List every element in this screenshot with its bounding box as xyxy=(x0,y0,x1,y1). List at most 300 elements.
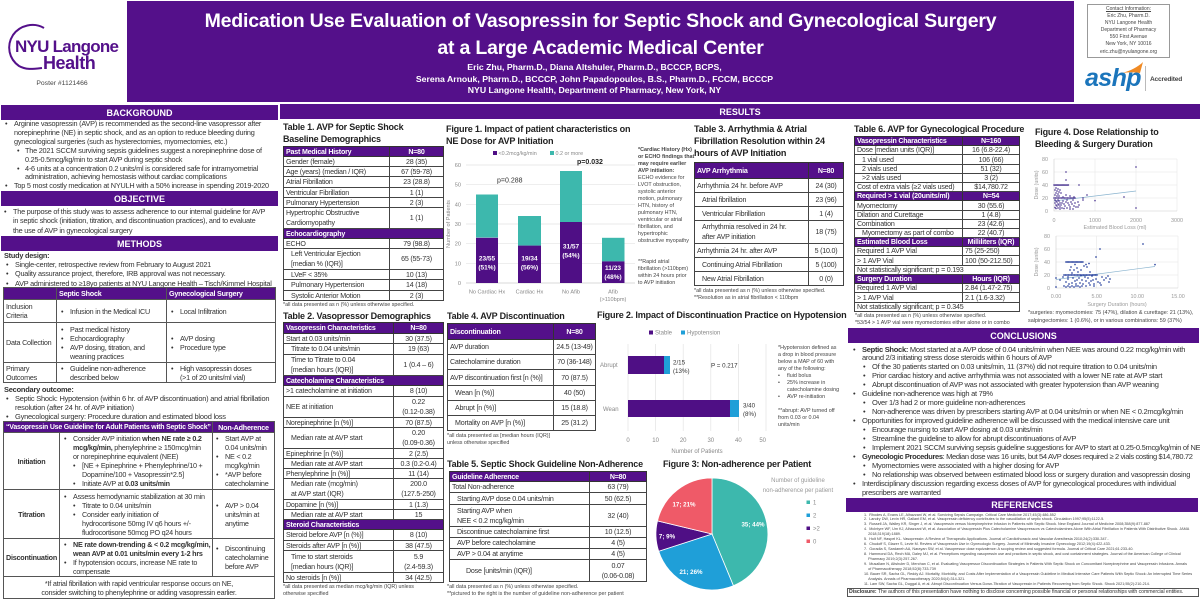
table 2: vasopressor demographics: Median rate (mcg/min) xyxy=(291,480,358,488)
table 5: septic shock guideline non-adherence: (0.06-0.08) xyxy=(602,572,634,580)
heading: table 1: Baseline Demographics xyxy=(283,134,381,144)
note: rapid atrial fibrillation definition: fibrillation (>110bpm) xyxy=(638,266,688,272)
table 6: AVP for gynecological procedure: $14,780.72 xyxy=(974,183,1008,191)
chart: figure 3 pie chart: 17; 21% xyxy=(672,502,696,508)
footnote: figure 4 xyxy=(1028,310,1193,324)
table 3: arrhythmia and atrial fibrillation resolution: New Atrial Fibrillation xyxy=(702,274,764,282)
table 6: AVP for gynecological procedure: Myomectomy as part of combo xyxy=(862,229,954,237)
text: secondary outcome: Secondary outcome: xyxy=(4,385,74,394)
table 3: arrhythmia and atrial fibrillation resolution: N=80 xyxy=(818,166,834,174)
table 3: arrhythmia and atrial fibrillation resolution xyxy=(694,162,844,286)
disclosure box: Disclosure: The authors of this presentation have nothing to disclose concerning possible financial or personal relationships with commercial entities. xyxy=(849,589,1183,595)
chart: figure 2 horizontal bars: (8%) xyxy=(743,411,756,418)
table 2: vasopressor demographics: Catecholamine Characteristics xyxy=(286,376,384,384)
table 6: AVP for gynecological procedure: 2.84 (1.47-2.75) xyxy=(965,284,1012,292)
table: study criteria: Data Collection xyxy=(6,338,51,347)
table 6: AVP for gynecological procedure: Myomectomy xyxy=(857,202,897,210)
table: study criteria: Echocardiography xyxy=(70,334,124,342)
table 2: vasopressor demographics: Median rate at AVP start xyxy=(291,510,362,518)
table 3: arrhythmia and atrial fibrillation resolution: Ventricular Fibrillation xyxy=(702,210,765,218)
heading: figure 3: Figure 3: Non-adherence per Patient xyxy=(663,459,811,469)
table: vasopressin use guideline: “Vasopressin Use Guideline for Adult Patients with Septic Shock” xyxy=(6,424,211,430)
text: conclusions: Prior cardiac history and active arrhythmia was not associated with a lower NE rate at AVP start xyxy=(872,371,1162,380)
text: references xyxy=(864,512,1192,586)
text: conclusions: Interdisciplinary discussion regarding excess doses of AVP for gynecological procedures with individual xyxy=(862,479,1176,488)
text: references: 3. Russell JA, Walley KR, Singer J, et al. Vasopressin versus Norepinephrine Infusion in Patients with Septic Shock. New England Journal of Medicine 2008;358(9):877-887 xyxy=(864,522,1150,526)
table 4: AVP discontinuation: 25 (31.2) xyxy=(561,419,588,427)
table: vasopressin use guideline: *AVP before xyxy=(225,470,261,479)
chart: figure 4 dose vs surgery duration scatter: 15.00 xyxy=(1171,294,1185,300)
table: vasopressin use guideline: anytime xyxy=(225,518,249,528)
text: references: 2018;319(18):1889. xyxy=(868,532,901,536)
table: vasopressin use guideline: Non-Adherence xyxy=(218,422,269,432)
table 2: vasopressor demographics: at AVP start (IQR) xyxy=(291,490,344,498)
table: vasopressin use guideline: *If atrial fibrillation with rapid ventricular response occurs on NE, xyxy=(45,578,233,588)
chart: figure 4 dose vs estimated blood loss scatter xyxy=(1034,157,1183,230)
title: at a Large Academic Medical Center xyxy=(437,36,764,58)
chart: figure 1 stacked bars: (48%) xyxy=(604,274,622,281)
authors and affiliation: Eric Zhu, Pharm.D., Diana Altshuler, Pharm.D., BCCCP, BCPS, xyxy=(467,62,722,72)
footnote: table 2 xyxy=(283,584,414,596)
text: background: gynecological surgeries (such as hysterectomies, myomectomies, etc.) xyxy=(14,137,227,146)
text: conclusions: Encourage nursing to start AVP dosing at 0.03 units/min xyxy=(872,425,1042,434)
table: study criteria: Criteria xyxy=(6,311,27,320)
text: conclusions: prescribers are warranted xyxy=(862,488,941,497)
chart: figure 4 dose vs surgery duration scatter xyxy=(1034,234,1185,308)
table 5: septic shock guideline non-adherence: Guideline Adherence xyxy=(452,472,519,480)
note: rapid atrial fibrillation definition: within 24 hours prior xyxy=(638,272,687,278)
table 2: vasopressor demographics: 1 (1.3) xyxy=(409,500,428,508)
table 5: septic shock guideline non-adherence: AVP > 0.04 at anytime xyxy=(457,550,523,558)
table 1: septic shock baseline demographics: Gender (female) xyxy=(286,158,335,166)
chart: figure 4 dose vs estimated blood loss scatter: 40 xyxy=(1042,183,1048,189)
table 2: vasopressor demographics: Steroid Characteristics xyxy=(286,520,359,528)
note: hypotension definition: from 0.03 or 0.04 xyxy=(778,414,819,420)
chart: figure 4 dose vs estimated blood loss scatter: 0 xyxy=(1052,218,1056,224)
table: vasopressin use guideline: Assess hemodynamic stabilization at 30 min xyxy=(73,492,205,500)
text: conclusions: around 2/3 initiating stress dose steroids within 6 hours of AVP xyxy=(862,353,1052,362)
table 5: septic shock guideline non-adherence: AVP before catecholamine xyxy=(457,539,536,547)
table 6: AVP for gynecological procedure: 2.1 (1.6-3.32) xyxy=(965,294,1005,302)
table 2: vasopressor demographics xyxy=(283,322,444,583)
chart: figure 1 stacked bars: p=0.032 xyxy=(577,159,603,166)
text: conclusions: Implement 2021 SCCM surviving sepsis guideline suggestions for AVP to start at 0.25-0.5mcg/kg/min of NE xyxy=(872,443,1200,452)
table 3: arrhythmia and atrial fibrillation resolution: 5 (100) xyxy=(815,260,837,268)
table 4: AVP discontinuation: Mortality on AVP [n (%)] xyxy=(455,419,525,427)
text: conclusions: Guideline non-adherence was high at 79% xyxy=(862,389,993,398)
text: conclusions xyxy=(853,344,1200,497)
chart: figure 1 stacked bars: p=0.288 xyxy=(497,178,523,184)
text: references: Analysis. Annals of Pharmacotherapy 2020;54(4):314-321. xyxy=(868,577,965,581)
text: study design: Single-center, retrospective review from February to August 2021 xyxy=(15,260,211,269)
legend: figure 3: 0 xyxy=(813,540,817,546)
table 6: AVP for gynecological procedure: Dilation and Curettage xyxy=(857,211,923,219)
chart: figure 1 stacked bars: 40 xyxy=(455,202,461,208)
table 2: vasopressor demographics: 0.20 xyxy=(412,429,425,437)
table: vasopressin use guideline: AVP > 0.04 xyxy=(225,500,259,510)
contact information box: NYU Langone Health xyxy=(1105,20,1152,26)
table: vasopressin use guideline: Start AVP at xyxy=(225,434,261,443)
text: references: 9. Musallam N, Altshuler D, Merchan C, et al. Evaluating Vasopressor Discontinuation Strategies in Patients With Septic Shock on Concomitant Norepinephrine and Vasopressin Infusions. Annals xyxy=(864,562,1187,566)
table 5: septic shock guideline non-adherence: Starting AVP when xyxy=(457,506,512,514)
chart: figure 1 stacked bars: No Afib xyxy=(562,290,580,296)
table 6: AVP for gynecological procedure: >2 vials used xyxy=(862,174,901,182)
table: vasopressin use guideline: mcg/kg/min xyxy=(225,461,260,470)
table 3: arrhythmia and atrial fibrillation resolution: AVP Arrhythmia xyxy=(697,166,748,174)
table 1: septic shock baseline demographics: N=80 xyxy=(408,148,425,156)
heading: table 4: Table 4. AVP Discontinuation xyxy=(447,311,565,321)
table 4: AVP discontinuation: Discontinuation xyxy=(450,328,501,336)
text: secondary outcome: resolution (after 24 hr. of AVP initiation) xyxy=(15,403,134,412)
table 1: septic shock baseline demographics: LVeF < 35% xyxy=(291,270,327,278)
table 3: arrhythmia and atrial fibrillation resolution: Arrhythmia 24 hr. after AVP xyxy=(697,246,777,254)
text: background: Arginine vasopressin (AVP) is recommended as the second-line vasopressor after xyxy=(14,119,261,128)
table 2: vasopressor demographics: 0.3 (0.2-0.4) xyxy=(400,460,437,468)
table: vasopressin use guideline: consider switching to phenylephrine or adding vasopressin earlier. xyxy=(41,588,237,596)
heading: table 3 xyxy=(694,124,825,158)
authors and affiliation xyxy=(416,62,773,95)
table 4: AVP discontinuation: 15 (18.8) xyxy=(561,404,588,412)
note: cardiac history definition: systolic anterior xyxy=(638,188,675,194)
heading: results xyxy=(280,104,1200,119)
text: conclusions: Streamline the guideline to allow for abrupt discontinuations of AVP xyxy=(872,434,1076,443)
title: Medication Use Evaluation of Vasopressin for Septic Shock and Gynecological Surgery xyxy=(205,10,996,32)
table 6: AVP for gynecological procedure: Cost of extra vials (≥2 vials used) xyxy=(857,183,954,191)
table: vasopressin use guideline: catecholamine xyxy=(225,479,268,488)
chart: figure 4 dose vs estimated blood loss scatter: 80 xyxy=(1042,157,1048,163)
table 2: vasopressor demographics: 30 (37.5) xyxy=(405,334,432,342)
chart: figure 4 dose vs surgery duration scatter: 0 xyxy=(1047,286,1050,292)
table 5: septic shock guideline non-adherence: 0.07 xyxy=(611,562,624,570)
text: objective xyxy=(4,207,265,235)
table 1: septic shock baseline demographics: Systolic Anterior Motion xyxy=(291,292,360,300)
chart: figure 4 dose vs estimated blood loss scatter: 60 xyxy=(1042,170,1048,176)
note: hypotension definition: 25% increase in xyxy=(787,380,825,386)
logo: NYU Langone Health: NYU Langone xyxy=(15,37,118,56)
chart: figure 1 stacked bars: 60 xyxy=(455,163,461,169)
table: study criteria: Local Infiltration xyxy=(180,306,226,316)
table 2: vasopressor demographics: 8 (10) xyxy=(410,387,427,395)
table: study criteria: Primary xyxy=(6,364,29,372)
text: background: 4-6 units at a concentration 0.2 units/ml is considered safe for intramyometrial xyxy=(25,164,258,173)
text: conclusions: Non-adherence was driven by prescribers starting AVP at 0.04 units/min or when NE < 0.2mcg/kg/min xyxy=(872,407,1183,416)
table 1: septic shock baseline demographics: Hypertrophic Obstructive xyxy=(286,209,359,217)
contact information box: New York, NY 10016 xyxy=(1105,41,1152,47)
logo: ashp accredited: ashp xyxy=(1085,64,1141,92)
text: references: 10. Bauer SR, Sacha GL, Reddy AJ. Mortality, Morbidity, and Costs After Implementation of a Vasopressin Guideline in Medical Intensive Care Patients With Septic Shock: An Interrupted Time Series xyxy=(864,572,1192,576)
note: cardiac history definition: obstructive myopathy xyxy=(638,238,689,244)
table 5: septic shock guideline non-adherence: Total Non-adherence xyxy=(452,483,514,491)
table 4: AVP discontinuation: Catecholamine duration xyxy=(450,358,521,366)
table 4: AVP discontinuation: AVP duration xyxy=(450,343,489,351)
heading: methods xyxy=(1,236,278,251)
table 5: septic shock guideline non-adherence: 63 (79) xyxy=(607,483,629,491)
chart: figure 1 stacked bars: Cardiac Hx xyxy=(516,290,544,296)
text: secondary outcome xyxy=(4,385,270,421)
note: cardiac history definition: may require earlier xyxy=(638,160,686,166)
table 6: AVP for gynecological procedure: N=54 xyxy=(983,192,999,200)
heading: figure 1: NE Dose for AVP Initiation xyxy=(446,136,553,146)
table 6: AVP for gynecological procedure: 1 (4.8) xyxy=(981,211,1001,219)
text: objective: The purpose of this study was to assess adherence to our internal guideline for AVP xyxy=(13,207,265,216)
legend: figure 3: Number of guideline xyxy=(771,478,826,484)
chart: figure 2 horizontal bars: (13%) xyxy=(673,368,690,375)
table 2: vasopressor demographics: 200.0 xyxy=(410,480,427,488)
table 1: septic shock baseline demographics: 23 (28.8) xyxy=(403,178,430,186)
table 6: AVP for gynecological procedure: 2 vials used xyxy=(862,165,897,173)
table 4: AVP discontinuation: Wean [n (%)] xyxy=(455,389,494,397)
table 2: vasopressor demographics: Time to start steroids xyxy=(291,552,353,560)
table 3: arrhythmia and atrial fibrillation resolution: after AVP initiation xyxy=(702,233,755,241)
table 2: vasopressor demographics: 34 (42.5) xyxy=(405,574,432,582)
table 6: AVP for gynecological procedure: Not statistically significant; p = 0.345 xyxy=(857,303,964,311)
table 1: septic shock baseline demographics: 79 (98.8) xyxy=(403,240,430,248)
note: cardiac history definition: LVOT obstruction, xyxy=(638,182,681,188)
footnote: figure 4: salpingectomies: 1 (0.6%), or in various combinations: 59 (37%) xyxy=(1028,318,1182,324)
table: vasopressin use guideline: 0.04 units/min xyxy=(225,443,267,452)
chart: figure 1 stacked bars: 31/57 xyxy=(563,244,580,250)
chart: figure 3 pie chart: 7; 9% xyxy=(659,534,676,540)
text: background: Top 5 most costly medication at NYULH with a 50% increase in spending 2019-2020 xyxy=(14,181,269,190)
table 2: vasopressor demographics: 8 (10) xyxy=(410,531,427,539)
footnote: table 3 xyxy=(694,288,825,300)
table 3: arrhythmia and atrial fibrillation resolution: Continuing Atrial Fibrillation xyxy=(702,260,782,268)
note: hypotension definition: AVP re-initiation xyxy=(787,394,825,400)
table 5: septic shock guideline non-adherence: N=80 xyxy=(610,472,626,480)
table: vasopressin use guideline: wean AVP at 0.01 units/min every 1-2 hrs xyxy=(73,548,203,558)
note: hypotension definition: fluid bolus xyxy=(787,372,811,378)
footnote: table 1: *all data presented as n (%) unless otherwise specified. xyxy=(283,302,414,308)
table 2: vasopressor demographics: 2 (2.5) xyxy=(409,450,428,458)
chart: figure 4 dose vs surgery duration scatter: 10.00 xyxy=(1131,294,1144,300)
table 6: AVP for gynecological procedure: 106 (66) xyxy=(979,156,1003,164)
table: study criteria: AVP dosing, titration, and xyxy=(70,342,145,352)
chart: figure 4 dose vs surgery duration scatter: 0.00 xyxy=(1051,294,1061,300)
table 4: AVP discontinuation: 70 (87.5) xyxy=(561,374,588,382)
table 2: vasopressor demographics: (127.5-250) xyxy=(401,490,436,498)
table 1: septic shock baseline demographics: 67 (59-78) xyxy=(401,168,432,176)
table 6: AVP for gynecological procedure: Dose [median units (IQR)] xyxy=(857,146,934,154)
legend: figure 3: 1 xyxy=(813,500,817,506)
table 1: septic shock baseline demographics: ECHO xyxy=(286,240,306,248)
table 3: arrhythmia and atrial fibrillation resolution: 0 (0) xyxy=(819,274,833,282)
table 6: AVP for gynecological procedure: Required 1 AVP Vial xyxy=(857,247,917,255)
text: references: of Pharmacotherapy 2018;52(8):733-739 xyxy=(868,567,936,571)
table: study criteria: Inclusion xyxy=(6,302,32,311)
text: objective: in septic shock (initiation, titration, and discontinuation practices), and to evaluate xyxy=(13,216,255,225)
table: vasopressin use guideline xyxy=(3,421,275,599)
table: study criteria: Outcomes xyxy=(6,372,37,382)
note: cardiac history definition: or ECHO findings that xyxy=(638,154,694,160)
table 2: vasopressor demographics: Phenylephrine [n (%)] xyxy=(286,470,350,478)
chart: figure 1 stacked bars: 20 xyxy=(455,242,461,248)
table 2: vasopressor demographics: Epinephrine [n (%)] xyxy=(286,450,343,458)
table 2: vasopressor demographics: >1 catecholamine at initiation xyxy=(286,387,372,395)
table 5: septic shock guideline non-adherence: 50 (62.5) xyxy=(605,494,631,502)
table: study criteria: Septic Shock xyxy=(59,289,102,298)
heading: figure 1: Figure 1. Impact of patient characteristics on xyxy=(446,124,630,134)
table: study criteria: (>1 of 20 units/ml vial) xyxy=(180,372,245,382)
table 6: AVP for gynecological procedure: Combination xyxy=(857,220,895,228)
chart: figure 1 stacked bars: 0 xyxy=(458,281,461,287)
chart: figure 1 stacked bars: Afib xyxy=(608,290,618,296)
text: conclusions: Over 1/3 had 2 or more guideline non-adherences xyxy=(872,398,1025,407)
table: study criteria: described below xyxy=(70,372,119,382)
table: vasopressin use guideline: fludrocortisone 50mcg PO q24 hours xyxy=(82,528,192,536)
note: cardiac history definition xyxy=(638,146,694,244)
heading: references xyxy=(846,498,1198,512)
table: study criteria xyxy=(3,287,276,383)
text: conclusions: Septic Shock: Most started at a AVP dose of 0.04 units/min when NEE was around 0.22 mcg/kg/min with xyxy=(862,344,1185,354)
table: study criteria: Gynecological Surgery xyxy=(169,289,243,298)
heading: table 3: Table 3. Arrhythmia & Atrial xyxy=(694,124,807,134)
table 3: arrhythmia and atrial fibrillation resolution: 23 (96) xyxy=(815,196,837,204)
note: cardiac history definition: AVP initiation: xyxy=(638,168,674,174)
contact information box: 550 First Avenue xyxy=(1110,34,1147,40)
table 1: septic shock baseline demographics: Past Medical History xyxy=(286,148,351,156)
chart: figure 2 horizontal bars: 0 xyxy=(626,438,630,444)
table 5: septic shock guideline non-adherence: 10 (12.5) xyxy=(605,528,631,536)
table 3: arrhythmia and atrial fibrillation resolution: Arrhythmia resolved in 24 hr. xyxy=(702,223,786,231)
chart: figure 4 dose vs surgery duration scatter: 5.00 xyxy=(1091,294,1102,300)
table 4: AVP discontinuation: 24.5 (13-49) xyxy=(556,343,593,351)
note: hypotension definition: any of the following: xyxy=(778,366,826,372)
table 4: AVP discontinuation: 70 (36-148) xyxy=(557,358,592,366)
text: references: 5. Holt NF, Haspel KL. Vasopressin: A Review of Therapeutic Applications. Journal of Cardiothoracic and Vascular Anesthesia 2010;24(2):330-347.. xyxy=(864,537,1109,541)
chart: figure 1 stacked bars: <0.2mcg/kg/min xyxy=(498,151,537,157)
text: study design: Quality assurance project, therefore, IRB approval was not necessary. xyxy=(15,269,226,278)
chart: figure 1 stacked bars: No Cardiac Hx xyxy=(469,290,505,296)
chart: figure 4 dose vs estimated blood loss scatter: Dose (units) xyxy=(1034,170,1040,200)
table 1: septic shock baseline demographics: 1 (1) xyxy=(410,214,423,222)
chart: figure 4 dose vs surgery duration scatter: 40 xyxy=(1044,260,1050,266)
heading: figure 1 xyxy=(446,124,630,146)
text: references: 8. Hammond DA, Rech MA, Daley MJ, et al. Perceptions regarding vasopressin use and practices in septic shock, and cost containment strategies. Journal of the American College of Clinical xyxy=(864,552,1181,556)
table 2: vasopressor demographics: 70 (87.5) xyxy=(405,418,432,426)
table 6: AVP for gynecological procedure xyxy=(854,136,1020,312)
table: vasopressin use guideline: [NE + Epinephrine + Phenylephrine/10 + xyxy=(82,461,203,470)
chart: figure 3 pie chart: 35; 44% xyxy=(741,522,765,528)
chart: figure 2 horizontal bars: Hypotension xyxy=(687,330,720,336)
footnote: table 4: unless otherwise specified xyxy=(447,440,509,446)
table 2: vasopressor demographics: 1 (0.4 – 6) xyxy=(403,361,434,369)
text: background: The 2021 SCCM surviving sepsis guidelines suggest a norepinephrine dose of xyxy=(25,146,262,155)
table 6: AVP for gynecological procedure: Required 1 AVP Vial xyxy=(857,284,917,292)
note: rapid atrial fibrillation definition xyxy=(638,258,688,286)
table 6: AVP for gynecological procedure: 75 (25-250) xyxy=(965,247,999,255)
chart: figure 2 horizontal bars: Stable xyxy=(655,330,673,336)
table 2: vasopressor demographics: Time to Titrate to 0.04 xyxy=(291,356,355,364)
table: vasopressin use guideline: NE rate down-trending & < 0.2 mcg/kg/min, xyxy=(73,540,210,548)
chart: figure 1 stacked bars: (56%) xyxy=(521,264,538,272)
chart: figure 2 horizontal bars xyxy=(600,330,767,455)
heading: conclusions xyxy=(848,328,1199,343)
note: cardiac history definition: hypertrophic xyxy=(638,230,668,236)
chart: figure 2 horizontal bars: P = 0.217 xyxy=(711,362,738,370)
logo: NYU Langone Health: Health xyxy=(43,53,95,73)
table 2: vasopressor demographics: (0.09-0.36) xyxy=(402,439,435,447)
table 1: septic shock baseline demographics: Left Ventricular Ejection xyxy=(291,250,361,258)
table 1: septic shock baseline demographics: 10 (13) xyxy=(406,270,427,278)
footnote: figure 4: *surgeries: myomectomies: 75 (47%), dilation & curettage: 21 (13%), xyxy=(1028,310,1193,316)
chart: figure 1 stacked bars: 11/23 xyxy=(605,265,621,272)
table 6: AVP for gynecological procedure: Required > 1 vial (20units/ml) xyxy=(857,192,949,200)
text: background: 0.25-0.5mcg/kg/min to start AVP during septic shock xyxy=(25,155,182,164)
chart: figure 1 stacked bars: 0.2 or more xyxy=(556,151,583,157)
table 1: septic shock baseline demographics: Ventricular Fibrillation xyxy=(286,188,349,196)
text: references: 11. Lam SW, Sacha GL, Duggal A, et al. Abrupt Discontinuation Versus Down-Titration of Vasopressin in Patients Recovering from Septic Shock. Shock 2021;55(2):210-214. xyxy=(864,582,1150,586)
note: rapid atrial fibrillation definition: **Rapid atrial xyxy=(638,258,669,264)
table 4: AVP discontinuation: N=80 xyxy=(566,328,583,336)
table 4: AVP discontinuation: Abrupt [n (%)] xyxy=(455,404,496,412)
text: references: Pharmacy 2019;2(3):257-267. xyxy=(868,557,918,561)
table 6: AVP for gynecological procedure: Not statistically significant; p = 0.193 xyxy=(857,266,964,274)
table 2: vasopressor demographics: Titrate to 0.04 units/min xyxy=(291,345,360,353)
table 2: vasopressor demographics: Steroid before AVP [n (%)] xyxy=(286,531,363,539)
chart: figure 4 dose vs surgery duration scatter: Surgery Duration (hours) xyxy=(1087,302,1147,308)
chart: figure 2 horizontal bars: 10 xyxy=(652,438,660,444)
text: conclusions: Myomectomies were associated with a higher dosing for AVP xyxy=(872,461,1059,470)
table 6: AVP for gynecological procedure: > 1 AVP Vial xyxy=(857,294,893,302)
note: cardiac history definition: ventricular or atrial xyxy=(638,216,682,222)
table 2: vasopressor demographics: Start at 0.03 units/min xyxy=(286,334,350,342)
text: study design xyxy=(4,251,272,288)
text: background xyxy=(5,119,269,190)
table: study criteria: Guideline non-adherence xyxy=(70,364,146,372)
note: hypotension definition: a drop in blood pressure xyxy=(778,352,836,358)
note: cardiac history definition: pulmonary HTN, xyxy=(638,210,677,216)
table: vasopressin use guideline: If hypotension occurs, increase NE rate to xyxy=(73,558,197,566)
chart: figure 4 dose vs surgery duration scatter: 60 xyxy=(1044,247,1050,253)
table 2: vasopressor demographics: Vasopressin Characteristics xyxy=(286,324,376,332)
table: vasopressin use guideline: Initiation xyxy=(18,456,45,466)
note: rapid atrial fibrillation definition: to AVP initiation xyxy=(638,280,675,286)
legend: figure 3: non-adherence per patient xyxy=(763,488,834,494)
table 2: vasopressor demographics: Norepinephrine [n (%)] xyxy=(286,418,353,426)
table 6: AVP for gynecological procedure: Estimated Blood Loss xyxy=(857,238,928,246)
note: cardiac history definition: motion, pulmonary xyxy=(638,196,682,202)
logo: NYU Langone Health xyxy=(8,24,118,73)
chart: figure 2 horizontal bars: Wean xyxy=(603,407,619,413)
note: cardiac history definition: HTN, history of xyxy=(638,202,674,208)
note: cardiac history definition: *Cardiac History (Hx) xyxy=(638,146,692,152)
chart: figure 4 dose vs estimated blood loss scatter: 2000 xyxy=(1130,218,1142,224)
chart: figure 1 stacked bars: 50 xyxy=(455,183,461,189)
chart: figure 4 dose vs surgery duration scatter: Dose (units) xyxy=(1034,247,1040,277)
table: vasopressin use guideline: or norepinephrine equivalent (NEE) xyxy=(73,452,178,461)
footnote: table 4: *all data presented as [median hours (IQR)] xyxy=(447,433,550,439)
text: conclusions: Opportunities for improved guideline adherence will be discussed with the medical intensive care unit xyxy=(862,416,1170,425)
chart: figure 2 horizontal bars: 30 xyxy=(707,438,715,444)
note: cardiac history definition: ECHO evidence for xyxy=(638,174,684,180)
table 2: vasopressor demographics: No steroids [n (%)] xyxy=(286,574,341,582)
text: study design: AVP administered to ≥18yo patients at NYU Langone Health – Tisch/Kimmel Hospital xyxy=(15,279,272,288)
text: secondary outcome: Septic Shock: Hypotension (within 6 hr. of AVP discontinuation) and atrial fibrillation xyxy=(15,394,269,403)
table 6: AVP for gynecological procedure: Vasopressin Characteristics xyxy=(857,137,947,145)
table 2: vasopressor demographics: 0.22 xyxy=(412,398,425,406)
heading: table 3: Fibrillation Resolution within 24 xyxy=(694,136,825,146)
text: references: 7. Goradia S, Sardaneh AA, Narayan SW, et al. Vasopressor dose equivalence: A scoping review and suggested formula. Journal of Critical Care 2021;61:233-40. xyxy=(864,547,1133,551)
legend: figure 3: 2 xyxy=(813,514,817,520)
table: vasopressin use guideline: catecholamine xyxy=(225,553,268,562)
table 1: septic shock baseline demographics: Age (years) (median / IQR) xyxy=(286,168,366,176)
heading: table 6: Table 6. AVP for Gynecological Procedure xyxy=(854,124,1024,134)
table: study criteria: Procedure type xyxy=(180,342,226,352)
table 1: septic shock baseline demographics: Echocardiography xyxy=(286,230,345,238)
footnote: table 2: otherwise specified xyxy=(283,590,328,596)
table 1: septic shock baseline demographics xyxy=(283,146,444,301)
table: study criteria: weaning practices xyxy=(70,352,124,360)
